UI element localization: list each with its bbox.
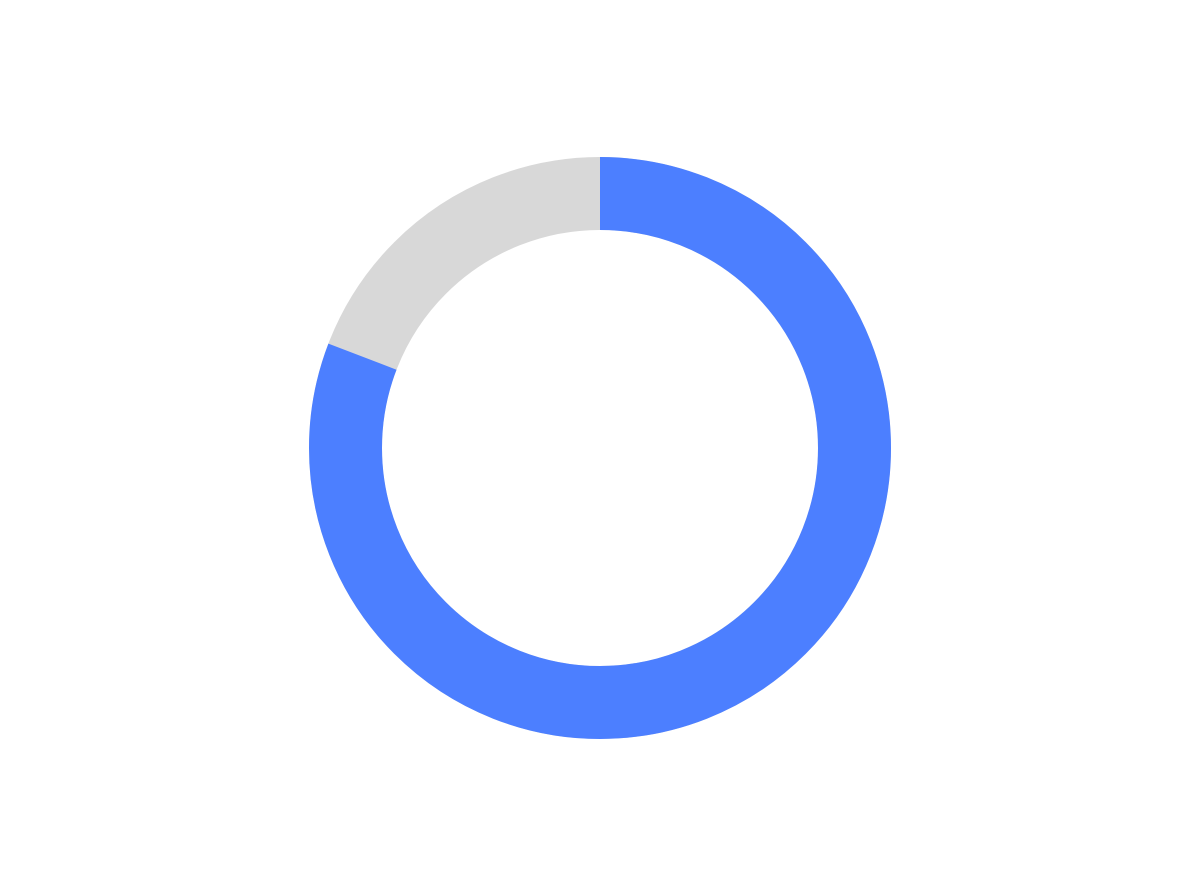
segment: main value (blue) bbox=[346, 194, 854, 702]
segment: remainder (grey) bbox=[346, 194, 854, 702]
